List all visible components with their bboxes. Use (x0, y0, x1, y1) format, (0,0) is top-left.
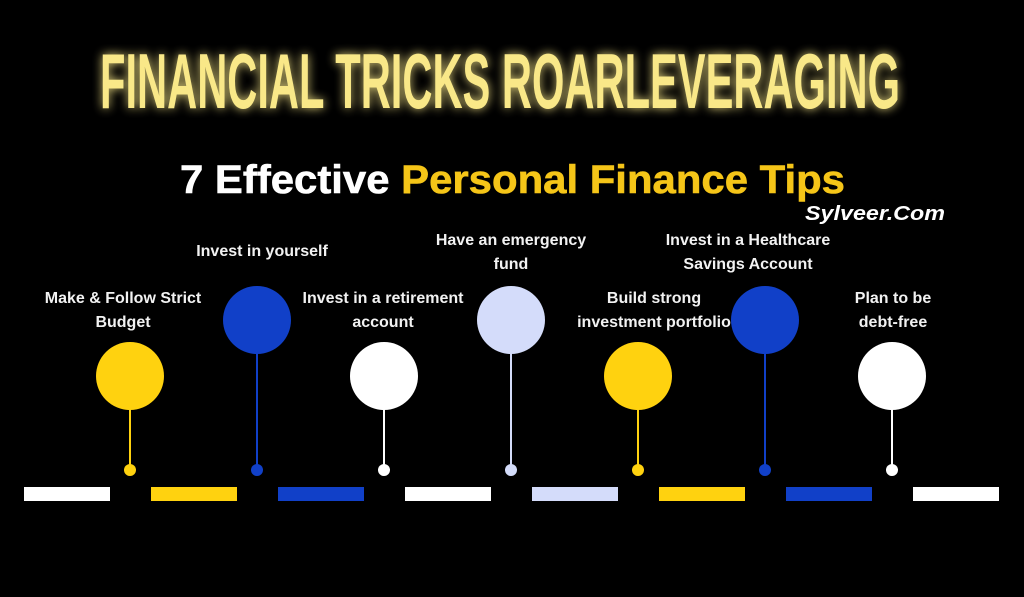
pin 6 (731, 286, 799, 476)
pin 4 (477, 286, 545, 476)
subtitle: 7 Effective Personal Finance Tips (180, 158, 845, 202)
pin 2 (223, 286, 291, 476)
pin 7 (858, 342, 926, 476)
label 5: Build strong (607, 290, 701, 307)
labels (45, 232, 931, 331)
label 5: investment portfolio (577, 314, 731, 331)
label 3: account (352, 314, 414, 331)
pin 5 (604, 342, 672, 476)
label 1: Make & Follow Strict (45, 290, 201, 307)
pins (96, 286, 926, 476)
timeline bars (24, 487, 999, 501)
watermark: Sylveer.Com (805, 203, 945, 225)
pin 3 (350, 342, 418, 476)
label 6: Invest in a Healthcare (666, 232, 830, 249)
label 4: Have an emergency (436, 232, 586, 249)
label 6: Savings Account (683, 256, 813, 273)
label 1: Budget (95, 314, 151, 331)
label 4: fund (494, 256, 528, 273)
pin 1 (96, 342, 164, 476)
label 2: Invest in yourself (196, 243, 328, 260)
label 7: debt-free (859, 314, 927, 331)
label 7: Plan to be (855, 290, 931, 307)
label 3: Invest in a retirement (303, 290, 463, 307)
